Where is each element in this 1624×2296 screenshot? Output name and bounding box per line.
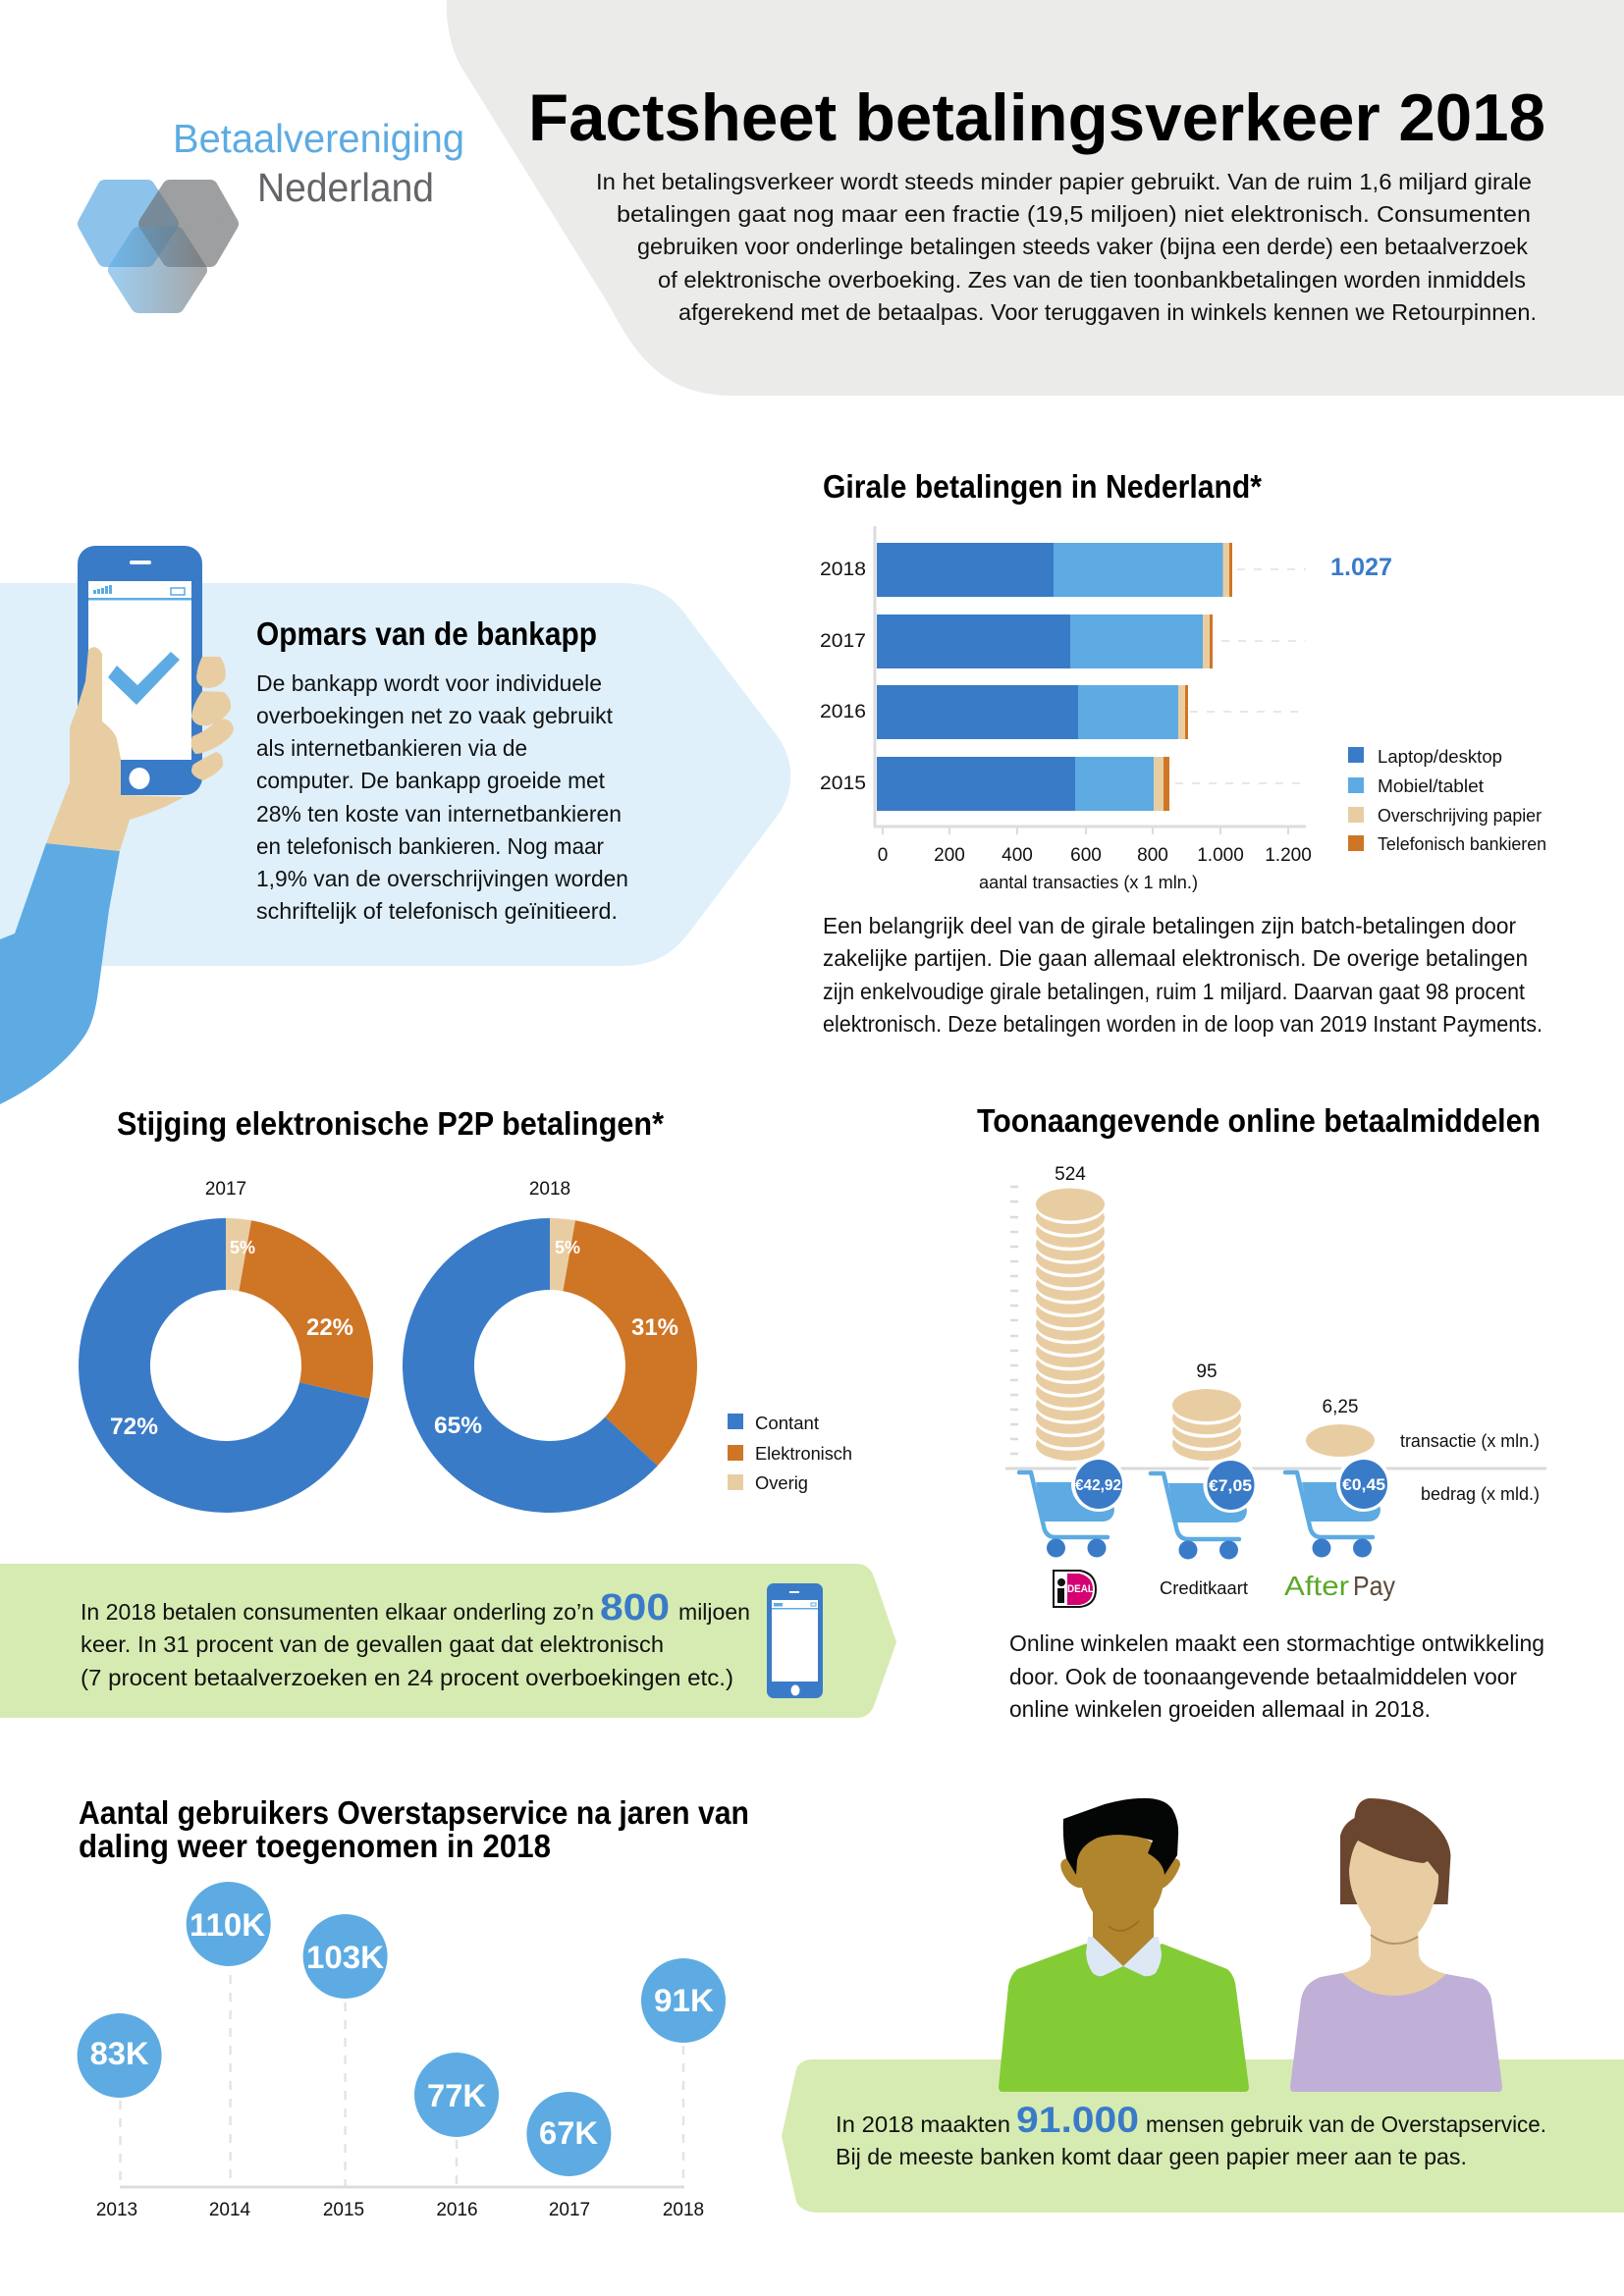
axis labels: 200 (934, 845, 965, 866)
value labels: 65% (434, 1413, 482, 1439)
bankapp text: 1,9% van de overschrijvingen worden (256, 866, 628, 891)
sweater (999, 1944, 1249, 2092)
year label: 2018 (529, 1179, 570, 1200)
heading: Overstapservice (79, 1794, 749, 1864)
axis title: aantal transacties (x 1 mln.) (979, 873, 1198, 892)
ears (1060, 1858, 1180, 1888)
year labels: 2015 (820, 774, 866, 794)
heading: Overstapservice: daling weer toegenomen in 2018 (79, 1828, 551, 1864)
bar 2018 (877, 543, 1232, 597)
amount: €7,05 (1209, 1476, 1252, 1495)
coin stack creditkaart (1172, 1389, 1241, 1465)
baseline (1005, 1467, 1546, 1470)
panel: bankapp (0, 583, 790, 966)
icon: phone (767, 1583, 823, 1698)
hand (46, 647, 184, 851)
callout text: In 2018 betalen consumenten elkaar onderling zo’n (81, 1599, 594, 1625)
girale text: elektronisch. Deze betalingen worden in de loop van 2019 Instant Payments. (823, 1011, 1543, 1037)
year labels: 2017 (820, 631, 866, 652)
cart AfterPay (1285, 1457, 1391, 1557)
hair (1063, 1798, 1178, 1875)
bankapp text: 28% ten koste van internetbankieren (256, 801, 622, 827)
bubble 67K: 67K (539, 2115, 598, 2151)
year labels: 2016 (436, 2200, 478, 2220)
logo text: Betaalvereniging (173, 116, 464, 161)
logo: AfterPay (1284, 1571, 1395, 1601)
header panel (447, 0, 1624, 396)
callout: 800 miljoen (0, 1564, 896, 1718)
intro text (596, 169, 1537, 325)
axis labels (878, 845, 1312, 866)
callout text: 91.000 (1016, 2100, 1139, 2140)
bubble 77K: 77K (427, 2078, 486, 2113)
logo: iDEAL: DEAL (1067, 1583, 1094, 1595)
axis labels: 600 (1070, 845, 1102, 866)
cart creditkaart (1151, 1458, 1259, 1559)
cart iDEAL (1019, 1457, 1126, 1557)
value labels: 5% (555, 1238, 580, 1257)
bubble 110K (187, 1882, 271, 1966)
year labels: 2018 (820, 560, 866, 580)
legend: donuts: Overig (755, 1473, 808, 1493)
year labels: 2015 (323, 2200, 364, 2220)
bubble 83K (78, 2013, 162, 2098)
label transactie: transactie (x mln.) (1400, 1431, 1540, 1451)
heading: Girale betalingen: Girale betalingen in Nederland* (823, 468, 1262, 505)
legend: girale betalingen (1348, 747, 1546, 854)
legend: girale betalingen: Mobiel/tablet (1378, 776, 1484, 796)
intro text: gebruiken voor onderlinge betalingen steeds vaker (bijna een derde) een betaalverzoek (637, 234, 1528, 259)
logo icon: overlapping hexagons (85, 187, 231, 305)
bankapp text (256, 670, 628, 924)
neck (1093, 1909, 1154, 1966)
year labels (820, 560, 866, 794)
heading: online betaalmiddelen: Toonaangevende online betaalmiddelen (977, 1102, 1541, 1139)
hair back (1340, 1798, 1451, 1904)
legend: girale betalingen: Laptop/desktop (1378, 747, 1502, 767)
illustration: man (999, 1798, 1249, 2092)
bubble 103K: 103K (306, 1940, 384, 1975)
intro text: of elektronische overboeking. Zes van de tien toonbankbetalingen worden inmiddels (658, 267, 1526, 293)
face (1077, 1834, 1164, 1932)
online text: online winkelen groeiden allemaal in 2018. (1009, 1696, 1431, 1722)
bar 2017 (877, 614, 1213, 668)
donut chart 2018 (403, 1179, 697, 1513)
bubble 77K (414, 2053, 499, 2137)
face (1349, 1841, 1438, 1944)
online text: Online winkelen maakt een stormachtige ontwikkeling (1009, 1630, 1544, 1656)
bankapp text: computer. De bankapp groeide met (256, 768, 606, 793)
amount: €0,45 (1342, 1475, 1385, 1494)
bubble 67K (526, 2092, 611, 2176)
chin line (1371, 1935, 1418, 1944)
intro text: In het betalingsverkeer wordt steeds minder papier gebruikt. Van de ruim 1,6 miljard girale (596, 169, 1532, 194)
bubble 91K: 91K (654, 1983, 714, 2018)
bubble 103K (303, 1914, 388, 1999)
fingers (191, 657, 234, 780)
girale text: zakelijke partijen. Die gaan allemaal elektronisch. De overige betalingen (823, 945, 1528, 971)
callout text: Bij de meeste banken komt daar geen papier meer aan te pas. (836, 2144, 1467, 2169)
girale text: Een belangrijk deel van de girale betalingen zijn batch-betalingen door (823, 913, 1516, 938)
label Creditkaart: Creditkaart (1160, 1578, 1248, 1598)
year label: 2017 (205, 1179, 246, 1200)
collar (1086, 1937, 1162, 1976)
total value: 1.027 (1330, 554, 1392, 581)
bankapp text: schriftelijk of telefonisch geïnitieerd. (256, 898, 618, 924)
donut chart 2017 (79, 1179, 373, 1513)
girale text: zijn enkelvoudige girale betalingen, ruim 1 miljard. Daarvan gaat 98 procent (823, 979, 1526, 1004)
neck (1342, 1924, 1446, 1996)
callout text: miljoen (678, 1599, 750, 1625)
phone (78, 546, 202, 795)
value 95: 95 (1196, 1362, 1218, 1382)
value labels (434, 1238, 678, 1439)
callout text: mensen gebruik van de Overstapservice. (1146, 2111, 1546, 2137)
axis labels: 1.200 (1265, 845, 1312, 866)
value labels: 72% (110, 1414, 158, 1440)
bar 2016 (877, 685, 1188, 739)
coin stack iDEAL (1036, 1188, 1105, 1465)
value labels: 31% (631, 1314, 678, 1341)
axis labels: 0 (878, 845, 888, 866)
illustration: woman (1290, 1798, 1502, 2092)
legend: donuts (728, 1414, 852, 1493)
bar chart: girale betalingen (820, 526, 1392, 892)
callout text (836, 2100, 1546, 2169)
logo text (173, 116, 464, 210)
value 6,25: 6,25 (1323, 1397, 1358, 1417)
girale text (823, 913, 1543, 1037)
logo: iDEAL (1054, 1571, 1096, 1607)
callout text: keer. In 31 procent van de gevallen gaat dat elektronisch (81, 1631, 664, 1657)
value 524: 524 (1055, 1164, 1086, 1185)
amount: €42,92 (1075, 1477, 1121, 1494)
chin line (1109, 1921, 1139, 1931)
top (1290, 1973, 1502, 2092)
heading: Overstapservice: Aantal gebruikers Overstapservice na jaren van (79, 1794, 749, 1831)
heading: P2P: Stijging elektronische P2P betalingen* (117, 1105, 664, 1142)
title: Factsheet betalingsverkeer 2018 (528, 80, 1545, 155)
icon: hand holding phone (0, 546, 234, 1104)
legend: donuts: Contant (755, 1414, 819, 1433)
callout: 91.000 (782, 2059, 1624, 2213)
logo: AfterPay: After (1284, 1571, 1349, 1601)
scale ticks (1010, 1187, 1018, 1454)
bankapp text: overboekingen net zo vaak gebruikt (256, 703, 614, 728)
year labels: 2016 (820, 702, 866, 722)
year labels: 2013 (96, 2200, 137, 2220)
year labels: 2018 (663, 2200, 704, 2220)
axis labels: 800 (1137, 845, 1168, 866)
logo (85, 116, 464, 305)
bubble 91K (641, 1958, 726, 2043)
bubble timeline (78, 1882, 726, 2220)
value labels: 5% (230, 1238, 255, 1257)
legend: donuts: Elektronisch (755, 1444, 852, 1464)
bubble 110K: 110K (189, 1907, 265, 1943)
chart: coin stacks and carts (1005, 1164, 1546, 1607)
heading: Opmars van de bankapp: Opmars van de bankapp (256, 615, 597, 652)
sleeve (0, 843, 120, 1104)
logo: AfterPay: Pay (1353, 1571, 1395, 1601)
bankapp text: en telefonisch bankieren. Nog maar (256, 833, 604, 859)
bankapp text: De bankapp wordt voor individuele (256, 670, 602, 696)
bankapp text: als internetbankieren via de (256, 735, 527, 761)
axis labels: 1.000 (1197, 845, 1244, 866)
year labels (96, 2200, 704, 2220)
callout text: (7 procent betaalverzoeken en 24 procent overboekingen etc.) (81, 1665, 733, 1690)
value labels: 22% (306, 1314, 353, 1341)
year labels: 2014 (209, 2200, 251, 2220)
online text (1009, 1630, 1544, 1722)
intro text: betalingen gaat nog maar een fractie (19,5 miljoen) niet elektronisch. Consumenten (617, 201, 1531, 227)
online text: door. Ook de toonaangevende betaalmiddelen voor (1009, 1664, 1517, 1689)
bar 2015 (877, 757, 1169, 811)
logo text: Nederland (257, 165, 434, 210)
value labels (110, 1238, 353, 1440)
axis labels: 400 (1001, 845, 1033, 866)
coin AfterPay (1306, 1424, 1375, 1457)
legend: girale betalingen: Telefonisch bankieren (1378, 834, 1546, 854)
callout text: 800 (600, 1587, 670, 1629)
intro text: afgerekend met de betaalpas. Voor teruggaven in winkels kennen we Retourpinnen. (678, 299, 1537, 325)
bubble 83K: 83K (90, 2036, 149, 2071)
callout text: In 2018 maakten (836, 2111, 1010, 2137)
year labels: 2017 (549, 2200, 590, 2220)
label bedrag: bedrag (x mld.) (1421, 1484, 1540, 1504)
legend: girale betalingen: Overschrijving papier (1378, 806, 1542, 826)
callout text (81, 1587, 750, 1690)
